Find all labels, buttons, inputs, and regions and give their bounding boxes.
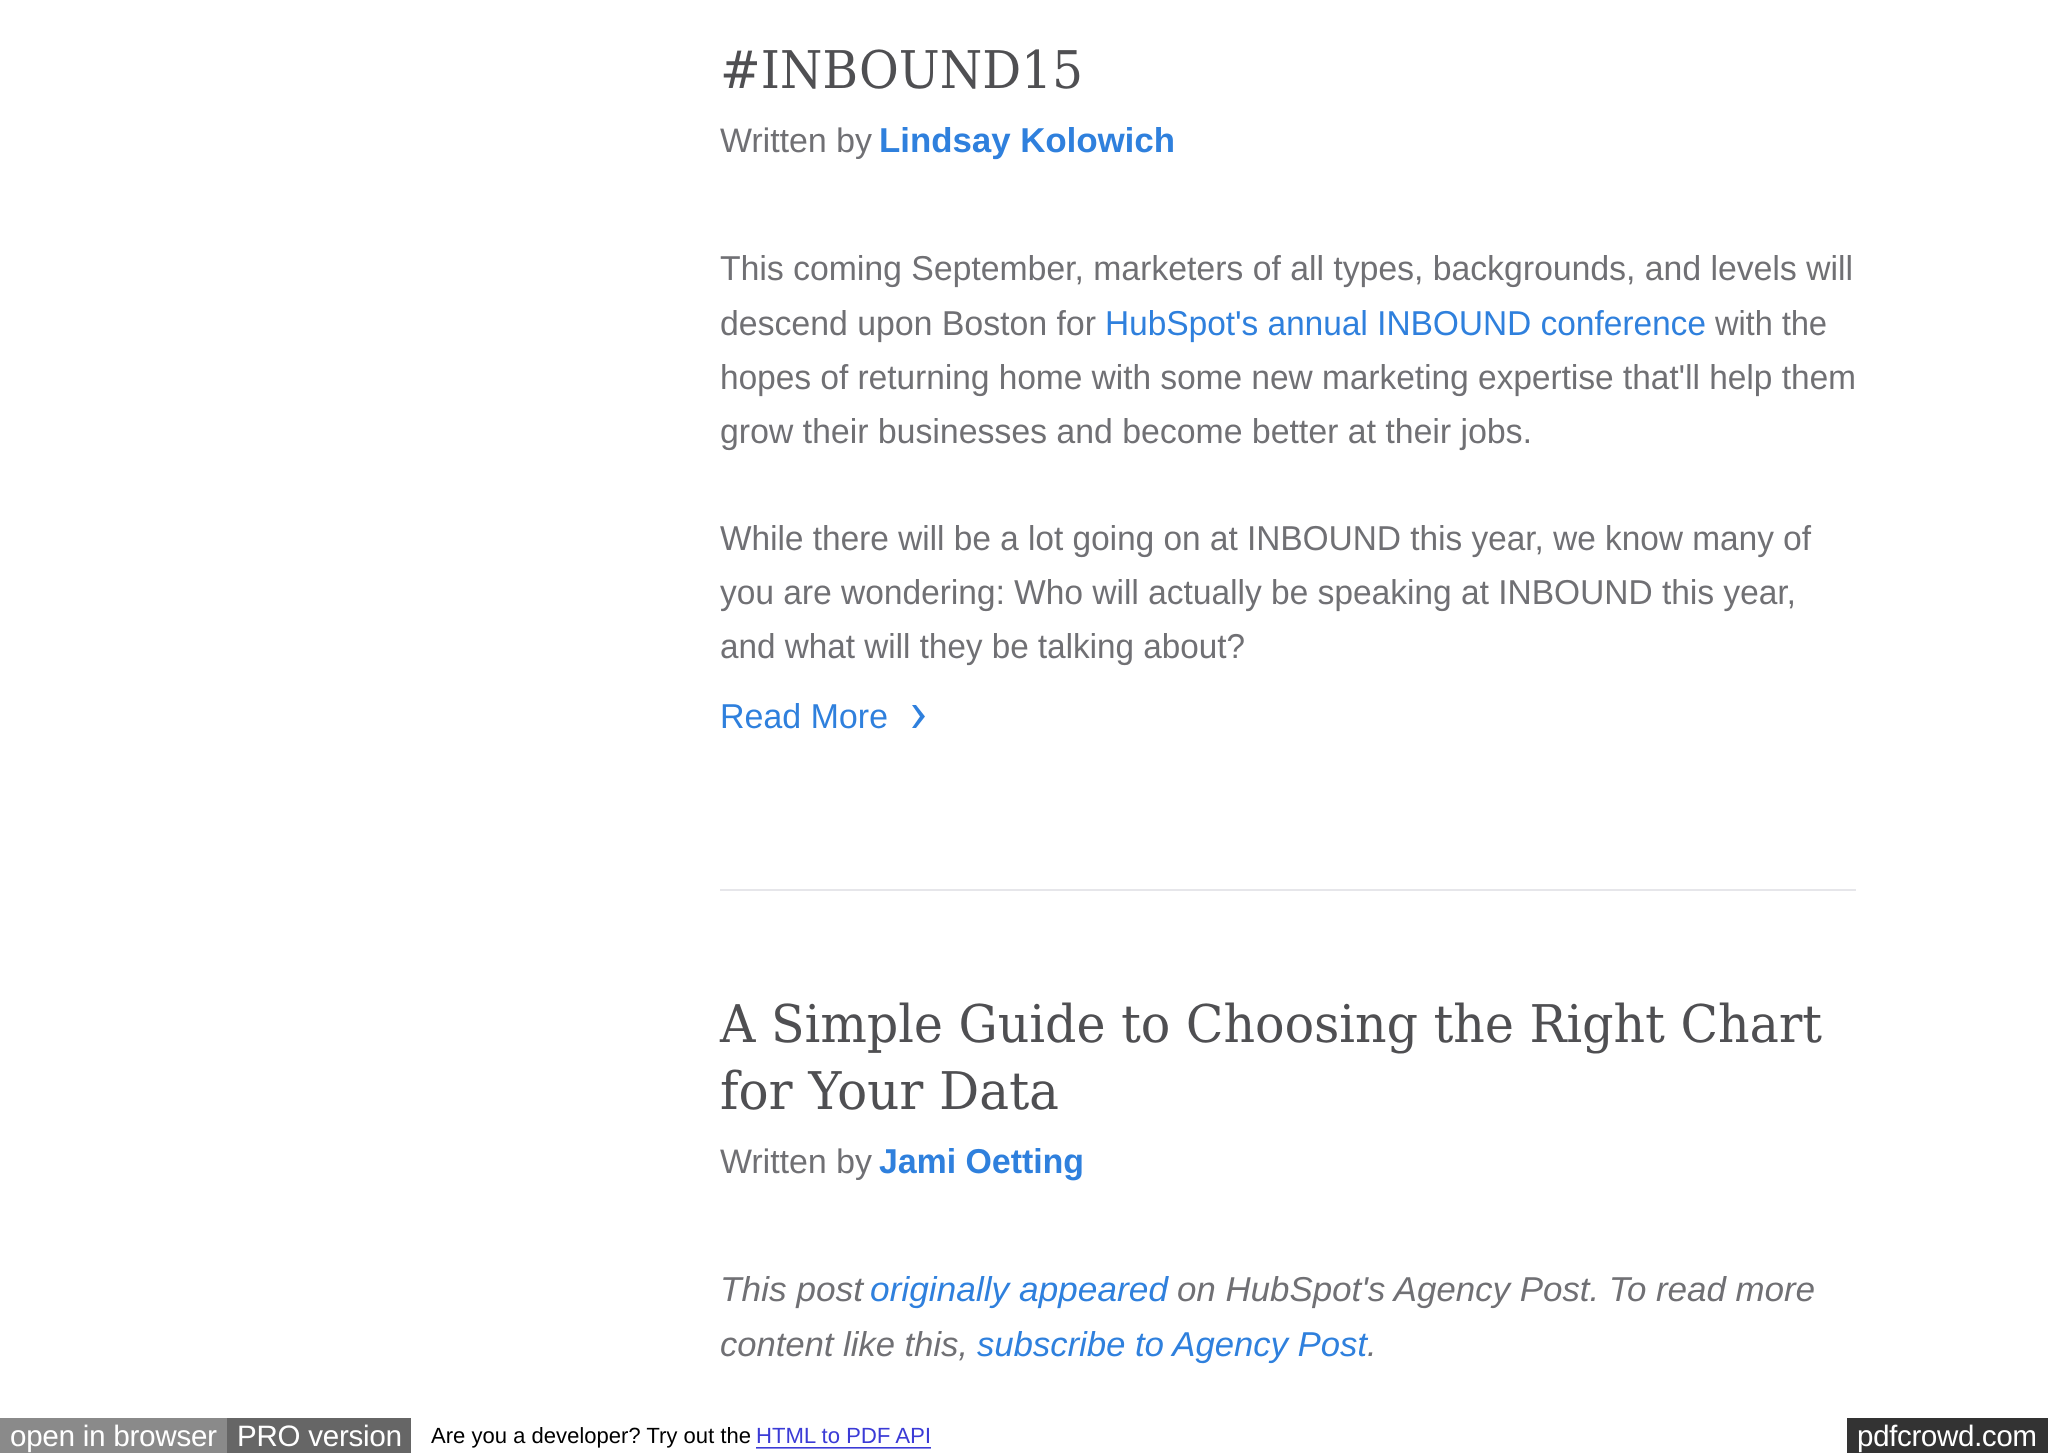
paragraph: question bbox=[720, 520, 1811, 666]
paragraph: intro: This coming September, marketers of all types, backgrounds, and levels will bbox=[720, 250, 1853, 288]
promo text bbox=[431, 1423, 931, 1449]
byline: Lindsay Kolowich: Lindsay Kolowich bbox=[879, 122, 1175, 160]
link: Read More: Read More bbox=[720, 698, 888, 736]
heading: A Simple Guide: for Your Data bbox=[720, 1062, 1059, 1122]
button: open in browser: open in browser bbox=[10, 1420, 217, 1453]
paragraph: italic note: content like this, bbox=[720, 1326, 968, 1364]
paragraph: italic note: on HubSpot's Agency Post. To read more bbox=[1177, 1271, 1815, 1309]
byline: Jami Oetting: Jami Oetting bbox=[879, 1143, 1084, 1181]
byline: Jami Oetting: Written by bbox=[720, 1143, 872, 1181]
promo text: HTML to PDF API bbox=[756, 1423, 931, 1448]
byline: Jami Oetting bbox=[720, 1143, 1084, 1181]
paragraph: italic note: . bbox=[1367, 1326, 1377, 1364]
article 1 bbox=[720, 41, 1856, 736]
heading: A Simple Guide bbox=[719, 995, 1822, 1122]
heading: A Simple Guide: A Simple Guide to Choosing the Right Chart bbox=[719, 995, 1822, 1055]
paragraph: intro: hopes of returning home with some new marketing expertise that'll help them bbox=[720, 359, 1856, 397]
paragraph: question: While there will be a lot going on at INBOUND this year, we know many of bbox=[720, 520, 1811, 558]
byline: Lindsay Kolowich bbox=[720, 122, 1175, 160]
paragraph: question: you are wondering: Who will actually be speaking at INBOUND this year, bbox=[720, 574, 1796, 612]
paragraph: italic note bbox=[720, 1271, 1815, 1364]
paragraph: intro: HubSpot's annual INBOUND conference bbox=[1105, 305, 1706, 343]
byline: Lindsay Kolowich: Written by bbox=[720, 122, 872, 160]
promo text: Are you a developer? Try out the bbox=[431, 1423, 751, 1448]
footer bar: pdfcrowd bbox=[0, 1418, 2048, 1453]
paragraph: italic note: subscribe to Agency Post bbox=[977, 1326, 1368, 1364]
paragraph: intro bbox=[720, 250, 1856, 451]
paragraph: intro: descend upon Boston for bbox=[720, 305, 1096, 343]
article 2 bbox=[719, 995, 1822, 1364]
paragraph: question: and what will they be talking about? bbox=[720, 628, 1245, 666]
paragraph: italic note: originally appeared bbox=[870, 1271, 1170, 1309]
heading: #INBOUND15: #INBOUND15 bbox=[720, 41, 1083, 101]
paragraph: intro: with the bbox=[1714, 305, 1827, 343]
badge: pdfcrowd.com: pdfcrowd.com bbox=[1857, 1420, 2037, 1453]
button: PRO version: PRO version bbox=[237, 1420, 402, 1453]
paragraph: italic note: This post bbox=[720, 1271, 864, 1309]
paragraph: intro: grow their businesses and become better at their jobs. bbox=[720, 413, 1532, 451]
icon: chevron bbox=[912, 705, 925, 728]
